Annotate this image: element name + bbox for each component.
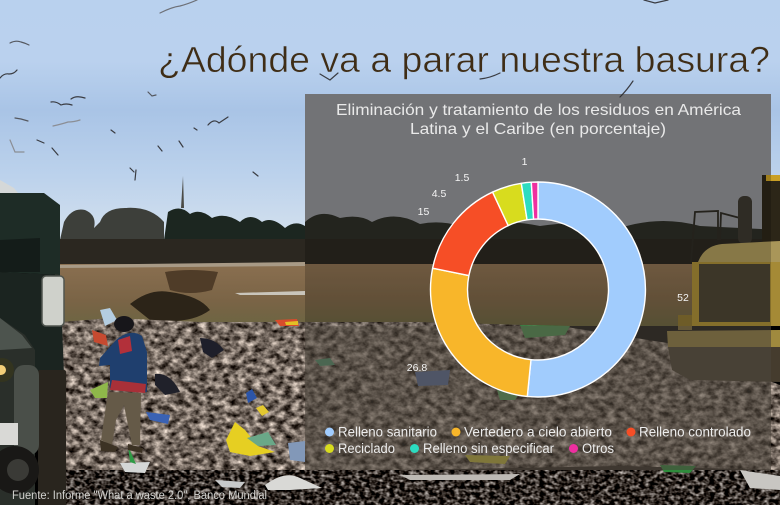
data labels [407,156,689,374]
dark dirt foreground [40,466,780,505]
legend item: Relleno sin especificar: Relleno sin especificar [423,441,554,456]
data labels: 1.5 [455,172,469,184]
legend item: Reciclado: Reciclado [338,441,395,456]
segment: Vertedero a cielo abierto 26.8 [430,268,531,396]
chart heading: Eliminación y tratamiento de los residuos en América [336,102,741,119]
bulldozer [667,175,780,382]
legend item: Relleno sanitario: Relleno sanitario [338,424,437,440]
far tree line [60,176,780,245]
birds in the sky [0,0,668,180]
panel: translucent chart background [305,94,771,470]
segment: Otros 1 [531,182,538,219]
segment: Relleno sin especificar 1.5 [521,182,534,220]
garbage field texture [62,318,780,470]
person [99,316,147,453]
chart heading [336,102,741,138]
legend item: Relleno controlado: Relleno controlado [639,424,751,440]
dark embankment [55,239,780,266]
scattered waste items [90,308,780,490]
data labels: 15 [418,206,429,218]
truck [0,180,66,505]
data labels: 52 [677,292,689,304]
legend [325,424,751,456]
data labels: 4.5 [432,188,446,200]
segment: Relleno controlado 15 [433,192,508,276]
legend item: Otros: Otros [582,441,614,456]
chart heading: Latina y el Caribe (en porcentaje) [410,121,666,138]
source note: Fuente: Informe "What a waste 2.0", Banco Mundial [12,490,267,502]
legend item: Vertedero a cielo abierto: Vertedero a cielo abierto [464,424,612,440]
segment: Relleno sanitario 52 [527,182,645,397]
data labels: 1 [522,156,528,168]
data labels: 26.8 [407,362,427,374]
donut chart [430,182,645,397]
brown soil terrace [55,264,780,326]
title: ¿Adónde va a parar nuestra basura? [158,39,770,80]
segment: Reciclado 4.5 [493,183,527,226]
